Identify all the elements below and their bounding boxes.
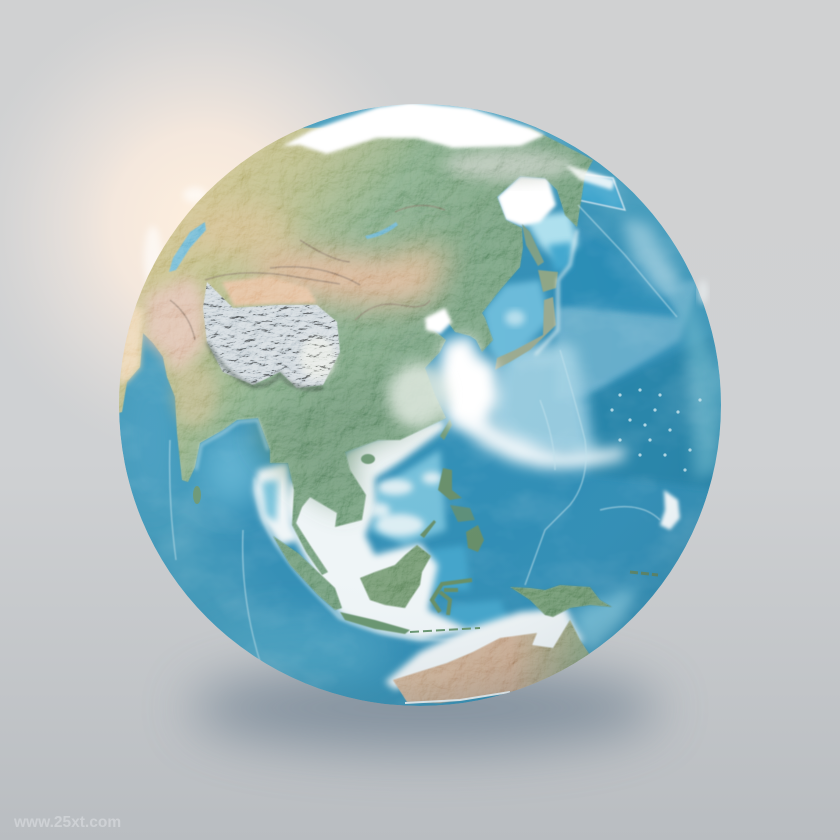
South-East China green (260, 370, 420, 510)
Sumatra (273, 536, 342, 610)
New Guinea (510, 585, 612, 617)
clouds: Yellow Sea and East China (425, 308, 452, 334)
Kazakh steppe (185, 204, 295, 256)
Andaman shelf (254, 462, 300, 545)
Okhotsk deep blue (548, 242, 572, 272)
Caspian Sea (169, 222, 206, 272)
Tibetan plateau (203, 282, 340, 388)
globe ground shadow (190, 666, 660, 750)
cloud wisps outside the left limb (144, 187, 207, 290)
Bismarck islands (630, 572, 658, 575)
cloud swirl east of Philippines (455, 405, 625, 469)
north Pacific limb streak (623, 217, 682, 295)
cloud: East China cloud disc (388, 362, 448, 428)
Coral sea shelf (575, 585, 640, 655)
Lake Baikal (365, 222, 398, 239)
land tone blobs (185, 204, 452, 314)
warm light glow (0, 0, 440, 460)
Himalaya shadow (207, 342, 323, 389)
Pacific cloud at right edge (660, 490, 680, 530)
Sri Lanka (193, 486, 201, 504)
Arafura shelf (385, 608, 585, 690)
pale sea east of China (490, 345, 595, 455)
Japan coast white (535, 230, 577, 355)
Australia (393, 620, 590, 703)
trench lines (170, 205, 677, 668)
shelf clouds over the South China Sea (370, 472, 442, 536)
Pacific deep panels (560, 232, 680, 320)
Borneo (360, 545, 431, 608)
Plateau ridge texture (203, 282, 340, 388)
Philippines (420, 468, 484, 552)
Bay of Bengal coast highlight (196, 420, 268, 470)
ocean mottling (110, 100, 730, 720)
Sea of Japan cloud highlights (505, 310, 525, 326)
Yellow Sea cloud (436, 335, 500, 428)
Java (340, 612, 410, 634)
Gobi tan (388, 246, 452, 278)
right limb teal haze (681, 306, 721, 482)
Taklamakan desert (222, 276, 317, 306)
earth sphere (90, 100, 730, 720)
Indian plain (173, 363, 217, 427)
Taiwan and Hainan (361, 419, 452, 464)
Micronesia dots (610, 388, 702, 472)
Lesser Sunda islands (410, 628, 480, 632)
Korea and Japan (495, 224, 558, 370)
Arabia desert (115, 305, 143, 385)
Siberian haze near ice (445, 149, 575, 181)
continental shelf: Sunda (285, 420, 470, 640)
Pacific lighter band (555, 280, 700, 400)
Plateau east lighter side (300, 336, 336, 380)
Okhotsk cyan (523, 212, 578, 262)
Mountain ridges: Tian Shan and Altai (170, 205, 445, 340)
Celebes and Banda seas (430, 545, 510, 632)
Indian Ocean glow (193, 424, 388, 680)
sphere shading (119, 104, 721, 706)
Bering sea (580, 174, 626, 212)
Iranian plateau (145, 275, 205, 378)
Andaman cyan patch (262, 480, 278, 522)
Arctic ice cap (283, 102, 545, 154)
Australian south coast (405, 692, 510, 703)
land relief texture (110, 100, 730, 720)
watermark: www.25xt.com (13, 814, 121, 831)
Asia landmass (90, 128, 593, 575)
Sea of Japan shelf (483, 280, 550, 365)
Central Asian desert (248, 242, 442, 314)
Bering land top edge ice (565, 165, 615, 190)
Okhotsk sea ice (497, 176, 556, 226)
Sulawesi (432, 580, 472, 615)
Sumatra and Java outer coast (255, 478, 470, 640)
limb cloud on east edge (698, 280, 708, 304)
ocean (119, 104, 721, 706)
South China Sea light shelf (370, 450, 446, 545)
